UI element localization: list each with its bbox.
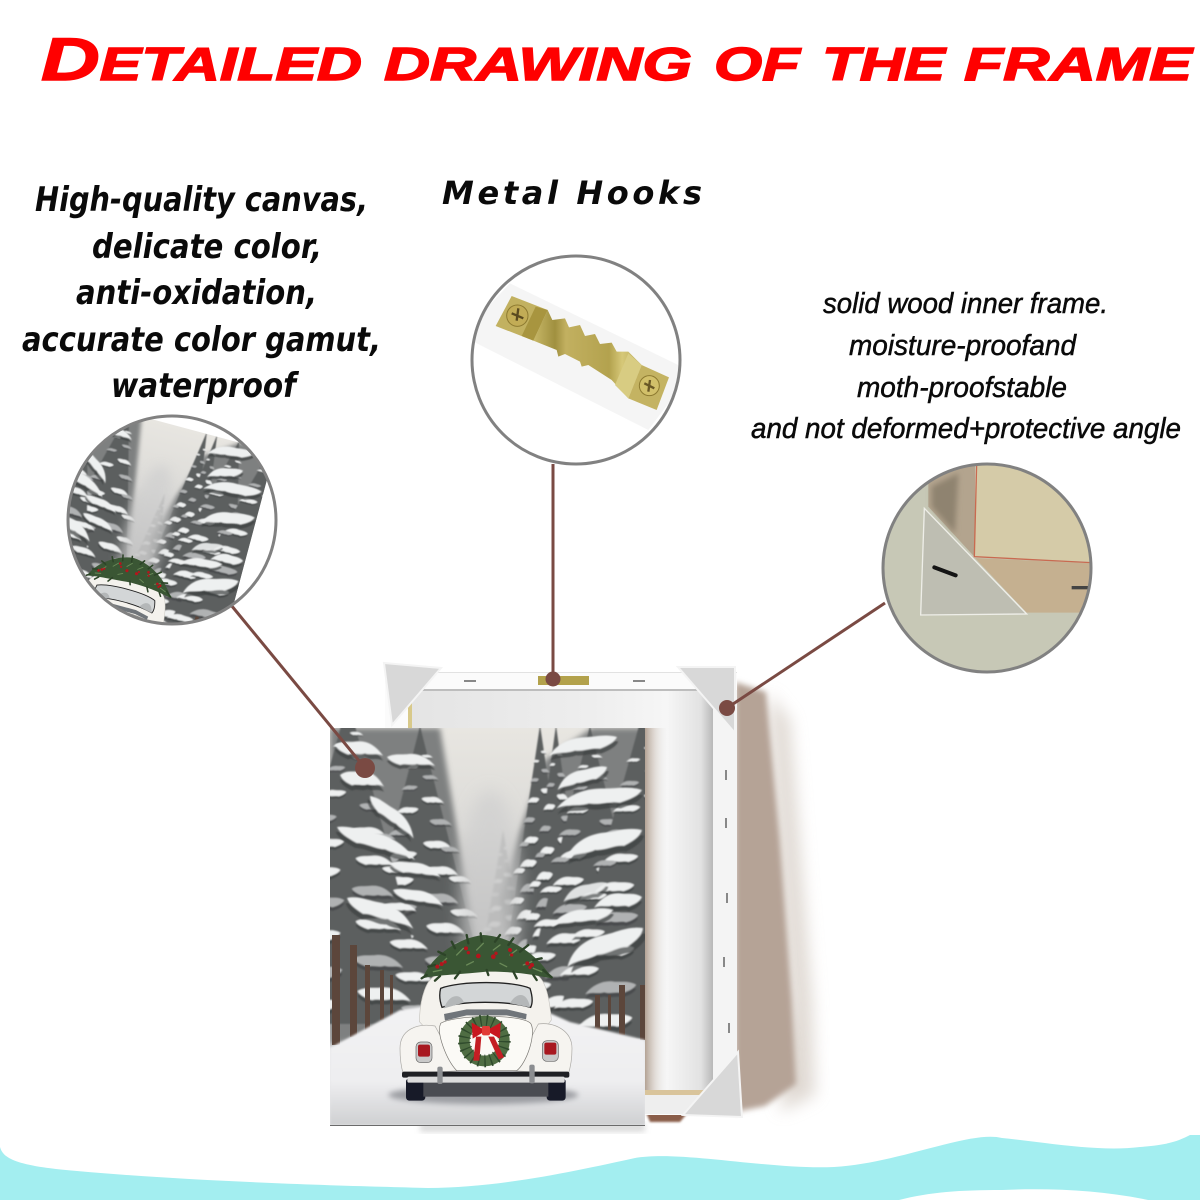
zoom circle: hook detail xyxy=(475,284,678,430)
text block: canvas features: delicate color, xyxy=(92,227,322,267)
text block: metal hooks: Metal Hooks xyxy=(442,174,702,212)
canvas back with stretcher frame xyxy=(384,663,742,1117)
mini hook xyxy=(538,676,589,685)
painting: winter forest with white car xyxy=(261,700,732,1126)
text block: canvas features: High-quality canvas, xyxy=(35,180,368,220)
zoom circle outlines xyxy=(68,256,1091,672)
corner protectors xyxy=(384,663,742,1117)
connector lines with dots xyxy=(231,464,885,778)
title: FRAME xyxy=(964,38,1194,90)
text block: canvas features: anti-oxidation, xyxy=(76,273,317,313)
title xyxy=(41,26,1194,93)
text block: wood frame: solid wood inner frame. xyxy=(823,288,1108,320)
text block: canvas features: waterproof xyxy=(111,366,300,406)
zoom circle: frame corner detail xyxy=(884,466,1090,670)
canvas back cast shadow xyxy=(420,682,815,1132)
connector: hook xyxy=(546,464,560,686)
background wave xyxy=(0,1135,1200,1200)
text block: canvas features: accurate color gamut, xyxy=(22,320,381,360)
connector: frame corner xyxy=(719,603,885,716)
connector: canvas xyxy=(231,605,375,778)
text block: wood frame xyxy=(751,288,1181,445)
zoom circle: canvas detail xyxy=(70,420,267,622)
text block: wood frame: and not deformed+protective angle xyxy=(751,413,1181,445)
title: DRAWING xyxy=(384,38,692,90)
text block: canvas features xyxy=(22,180,381,406)
title: D ETAILED xyxy=(41,26,362,93)
text block: wood frame: moth-proofstable xyxy=(857,372,1067,404)
title: THE xyxy=(822,38,947,90)
text block: wood frame: moisture-proofand xyxy=(849,330,1077,362)
title: OF xyxy=(714,38,803,90)
